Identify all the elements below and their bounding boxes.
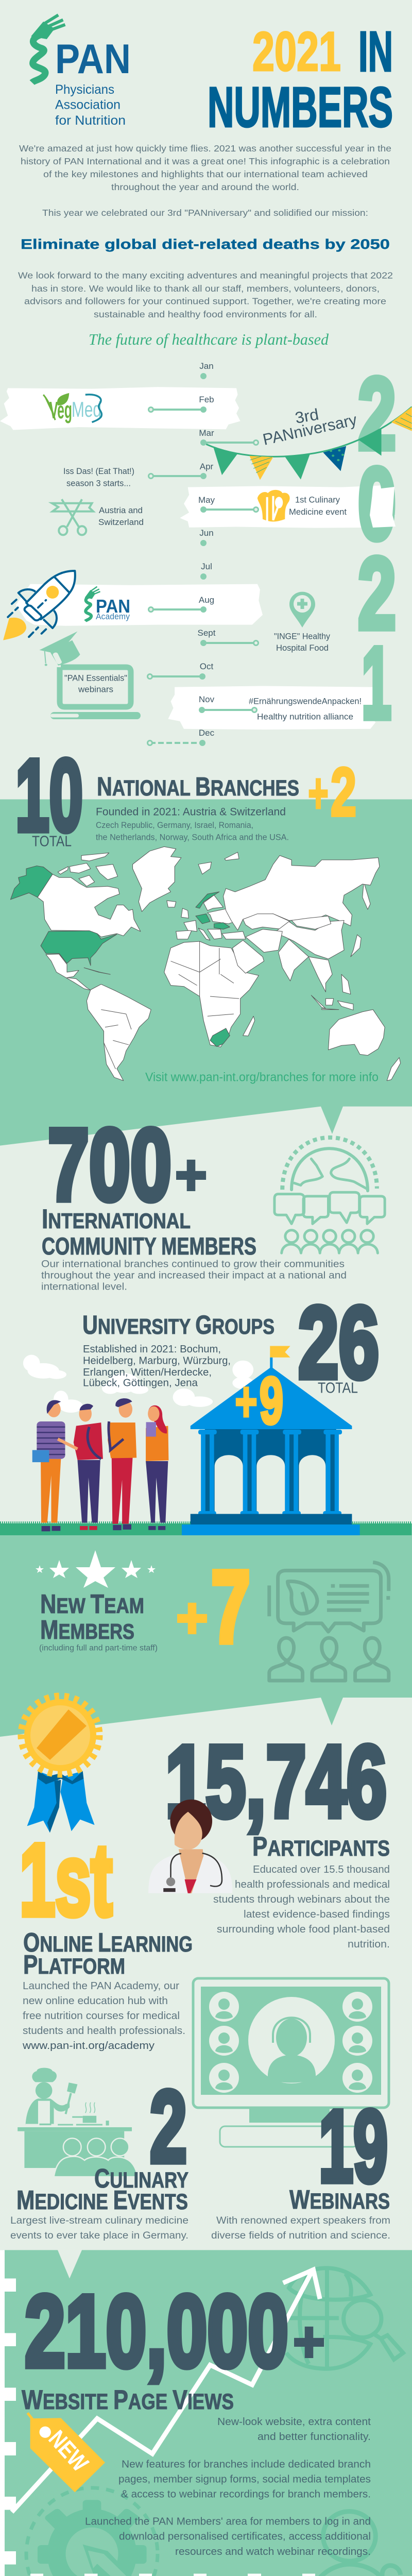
text: community description: Our international branches continued to grow their communities (41, 1259, 345, 1269)
text: visit branches: Visit www.pan-int.org/branches for more info (145, 1071, 379, 1084)
intro text: This year we celebrated our 3rd "PANniversary" and solidified our mission: (42, 208, 368, 218)
panel: national branches background (0, 800, 412, 1146)
map: alaska (10, 866, 53, 900)
text: participants description (213, 1864, 390, 1950)
text: Austria and Switzerland: Austria and (99, 505, 143, 515)
text: website description: New-look website, extra content (217, 2416, 371, 2428)
logo: VegMed: Veg (49, 397, 72, 423)
text: branch list: the Netherlands, Norway, South Africa and the USA. (96, 833, 289, 842)
icon: graduation cap (39, 631, 80, 666)
thanks text: has in store. We would like to thank all our staff, members, volunteers, donors, (31, 283, 380, 294)
thanks text (18, 270, 393, 319)
map: south africa (210, 1028, 230, 1046)
text: branch list: Czech Republic, Germany, Israel, Romania, (96, 820, 253, 830)
text: webinars description: With renowned expert speakers from (216, 2215, 390, 2226)
text: 1st Culinary Medicine event: 1st Culinary (295, 495, 340, 505)
heading: online learning platform: PLATFORM (23, 1950, 125, 1980)
text: 1st Culinary Medicine event: Medicine event (289, 507, 347, 517)
heading: international community members (42, 1204, 256, 1260)
map: asia (222, 914, 361, 1010)
background icon: globe and magnifier (284, 2268, 403, 2369)
map: united states (41, 931, 117, 965)
big number: 700+: + (175, 1143, 207, 1207)
plus seven: 7 (211, 1550, 250, 1664)
logo: VegMed (43, 394, 101, 423)
text: healthy nutrition alliance (249, 697, 362, 721)
icon: university building (182, 1346, 360, 1535)
thanks text: sustainable and healthy food environments for all. (94, 309, 317, 319)
month labels: Nov (199, 694, 215, 704)
map: europe (176, 895, 235, 940)
icon: ribbon cutting scissors (52, 499, 93, 535)
logo subtitle (55, 82, 126, 128)
text: healthy nutrition alliance: Healthy nutrition alliance (257, 711, 353, 721)
chart axis (0, 2250, 337, 2576)
text: webinars description: diverse fields of nutrition and science. (211, 2230, 390, 2241)
text: 1st Culinary Medicine event (289, 495, 347, 517)
anniversary label: 3rd (294, 405, 320, 427)
text: participants description: nutrition. (348, 1939, 390, 1950)
icon: medal (22, 1697, 99, 1833)
month labels: Feb (199, 395, 214, 404)
intro text (19, 143, 391, 218)
arrow: rising trend (12, 2269, 320, 2512)
icon: new tag (28, 2413, 105, 2492)
map: africa (164, 941, 259, 1047)
icon: stars (36, 1550, 156, 1588)
text: university list: Heidelberg, Marburg, Würzburg, (83, 1355, 231, 1366)
month labels: Dec (199, 728, 215, 738)
logo: PAN header (31, 15, 131, 128)
text: INGE Healthy Hospital Food (274, 631, 330, 653)
text: online platform description: students and health professionals. (23, 2025, 185, 2037)
text: community description: throughout the year and increased their impact at a national and (41, 1270, 347, 1281)
month labels: Mar (199, 428, 214, 438)
month labels: Oct (200, 662, 213, 671)
plus two (308, 754, 356, 831)
logo subtitle: Association (55, 98, 121, 112)
student two (58, 1404, 103, 1530)
plus nine: + (235, 1370, 258, 1433)
heading: new team members (39, 1589, 158, 1652)
logo subtitle: for Nutrition (55, 113, 126, 128)
map: highlighted branches in europe (196, 892, 230, 929)
thanks text: advisors and followers for your continued support. Together, we're creating more (24, 296, 386, 306)
heading: culinary medicine events: CULINARY (94, 2164, 188, 2194)
map: south america (87, 984, 151, 1081)
text: online platform description: free nutrition courses for medical (23, 2010, 180, 2022)
bunting (206, 407, 412, 480)
month labels: Jan (199, 361, 214, 371)
text: online platform description: www.pan-int.org/academy (22, 2040, 154, 2052)
icon: team speech bubble (269, 1563, 389, 1681)
background icon: user lock (310, 2512, 404, 2576)
big number: 2 culinary: 2 (150, 2070, 187, 2183)
intro text: We're amazed at just how quickly time flies. 2021 was another successful year in the (19, 143, 391, 154)
panel: website and brochures background (0, 2250, 412, 2576)
heading: new team members: MEMBERS (40, 1615, 134, 1645)
month labels: Sept (198, 628, 216, 638)
text: community description (41, 1259, 347, 1292)
text: Austria and Switzerland: Switzerland (98, 517, 144, 527)
heading: national branches: NATIONAL BRANCHES (97, 772, 299, 801)
text: participants description: health professionals and medical (235, 1879, 390, 1890)
heading: new team members: (including full and part-time staff) (39, 1643, 158, 1652)
icon: globe community (274, 1138, 385, 1253)
plus two: 2 (331, 754, 356, 831)
month labels: Aug (199, 595, 214, 605)
text: Austria and Switzerland (98, 505, 144, 527)
month connectors (150, 410, 256, 743)
grass (0, 1523, 412, 1535)
icon: chef hat with cutlery (258, 490, 290, 521)
text: community description: international level. (41, 1282, 127, 1292)
big number: 26 total: 26 (298, 1285, 379, 1399)
logo wordmark: PAN (55, 36, 131, 82)
text: INGE Healthy Hospital Food: Hospital Food (276, 643, 329, 653)
month labels: Jun (199, 528, 214, 538)
text: university list (83, 1344, 231, 1389)
text: branch list (96, 806, 289, 842)
text: healthy nutrition alliance: #ErnährungswendeAnpacken! (249, 697, 362, 706)
logo: PAN Academy (85, 587, 130, 621)
heading: culinary medicine events (16, 2164, 188, 2215)
map: greenland (133, 846, 181, 911)
anniversary label: PANniversary (261, 411, 359, 449)
map: new zealand (387, 1058, 401, 1081)
text: branch list: Founded in 2021: Austria & Switzerland (96, 806, 286, 818)
logo: PAN Academy: PAN (96, 596, 130, 617)
text: Iss Das: season 3 starts... (66, 478, 131, 488)
plus seven (176, 1550, 250, 1664)
text: website description: pages, member signup forms, social media templates (118, 2474, 371, 2485)
map: canada (38, 874, 141, 937)
icon: laptop with PAN Essentials webinars (50, 667, 141, 719)
big number: 210,000+: + (293, 2310, 325, 2374)
intro text: of the key milestones and highlights that our international team achieved (43, 169, 368, 179)
title (208, 20, 393, 139)
heading: online learning platform: ONLINE LEARNING (23, 1928, 193, 1958)
text: website description (85, 2416, 371, 2557)
icon: fork and snake (31, 15, 65, 82)
heading: new team members: NEW TEAM (40, 1589, 144, 1619)
mission statement: Eliminate global diet-related deaths by 2050 (21, 236, 390, 252)
text: participants description: surrounding whole food plant-based (217, 1924, 390, 1935)
icon: INGE hospital pin (289, 592, 315, 628)
map: australia (329, 1010, 385, 1055)
heading: culinary medicine events: MEDICINE EVENTS (16, 2185, 188, 2215)
month labels (198, 361, 216, 738)
heading: university groups: UNIVERSITY GROUPS (82, 1310, 274, 1340)
month labels: Jul (201, 562, 212, 571)
icon: webinar monitor (193, 1978, 389, 2147)
month labels: May (198, 495, 215, 505)
student four (146, 1405, 168, 1530)
panel: new team members background (0, 1535, 412, 1737)
text: university list: Lübeck, Göttingen, Jena (83, 1378, 198, 1389)
map: russia (224, 855, 380, 930)
heading: website page views: WEBSITE PAGE VIEWS (22, 2385, 234, 2415)
icon: new tag: NEW (44, 2425, 94, 2477)
text: INGE Healthy Hospital Food: "INGE" Healthy (274, 631, 330, 641)
timeline brush strokes (0, 387, 396, 730)
text: Iss Das: Iss Das! (Eat That!) (63, 466, 134, 476)
timeline months (147, 361, 259, 746)
clouds (23, 1355, 253, 1413)
title: 2021 (252, 20, 341, 82)
student three (108, 1398, 136, 1530)
month labels: Apr (200, 462, 214, 471)
intro text: throughout the year and around the world. (111, 182, 299, 192)
big number: 700+: 700 (48, 1108, 171, 1222)
icon: laptop with PAN Essentials webinars: "PAN Essentials" (64, 673, 127, 683)
text: participants description: students through webinars about the (213, 1894, 390, 1905)
text: Iss Das (63, 466, 134, 488)
month rings (147, 407, 259, 745)
background icon: gear (26, 2488, 159, 2576)
text: culinary description: Largest live-stream culinary medicine (10, 2215, 188, 2226)
icon: chef cooking demo (18, 2068, 138, 2177)
student one (32, 1400, 65, 1531)
plus two: + (308, 761, 329, 825)
thanks text: We look forward to the many exciting adventures and meaningful projects that 2022 (18, 270, 393, 280)
map: iceland and islands (167, 852, 370, 909)
heading: participants: PARTICIPANTS (252, 1832, 390, 1862)
big number: 210,000+: 210,000 (25, 2274, 288, 2388)
logo subtitle: Physicians (55, 82, 114, 97)
icon: rocket (3, 571, 75, 640)
text: website description: Launched the PAN Members' area for members to log in and (85, 2516, 371, 2528)
big number: 10 total (15, 738, 83, 852)
plus nine: 9 (260, 1364, 283, 1438)
text: online platform description: Launched the PAN Academy, our (23, 1980, 179, 1992)
heading: online learning platform (23, 1928, 193, 1980)
text: website description: download personalised certificates, access additional (119, 2531, 371, 2543)
illustration: doctor (148, 1800, 232, 1893)
text: website description: & access to webinar recordings for branch members. (121, 2489, 371, 2500)
month dots (199, 373, 207, 746)
heading: international community members: COMMUNITY MEMBERS (42, 1232, 256, 1260)
logo: PAN Academy: Academy (96, 612, 130, 621)
text: online platform description (22, 1980, 185, 2052)
icon: laptop with PAN Essentials webinars: webinars (78, 684, 113, 694)
map: mexico and central america (46, 954, 110, 990)
plus nine (235, 1364, 283, 1438)
text: university list: Established in 2021: Bochum, (83, 1344, 221, 1355)
plus seven: + (176, 1586, 208, 1650)
big number: 10 total: 10 (15, 738, 83, 852)
text: culinary description (10, 2215, 188, 2241)
tagline: The future of healthcare is plant-based (89, 330, 329, 348)
text: participants description: Educated over 15.5 thousand (253, 1864, 390, 1875)
text: webinars description (211, 2215, 390, 2241)
big text: 1st: 1st (20, 1823, 112, 1937)
map: arctic islands (58, 853, 117, 886)
text: participants description: latest evidence-based findings (244, 1909, 390, 1920)
text: culinary description: events to ever take place in Germany. (10, 2230, 188, 2241)
text: university list: Erlangen, Witten/Herdecke, (83, 1367, 212, 1378)
illustration: students (32, 1398, 168, 1531)
text: website description: and better functionality. (258, 2431, 371, 2443)
world map (10, 846, 401, 1081)
heading: webinars: WEBINARS (289, 2185, 390, 2215)
map: madagascar (243, 1016, 255, 1036)
big number: 26 total: TOTAL (318, 1380, 358, 1396)
intro text: history of PAN International and it was a great one! This infographic is a celebration (21, 156, 390, 166)
big vertical year 2021 (358, 357, 396, 740)
big number: 10 total: TOTAL (32, 834, 72, 850)
logo: VegMed: Med (72, 397, 101, 421)
heading: international community members: INTERNATIONAL (42, 1204, 191, 1234)
text: online platform description: new online education hub with (23, 1995, 168, 2007)
text: website description: New features for branches include dedicated branch (122, 2459, 371, 2470)
text: website description: resources and watch webinar recordings. (175, 2546, 371, 2557)
